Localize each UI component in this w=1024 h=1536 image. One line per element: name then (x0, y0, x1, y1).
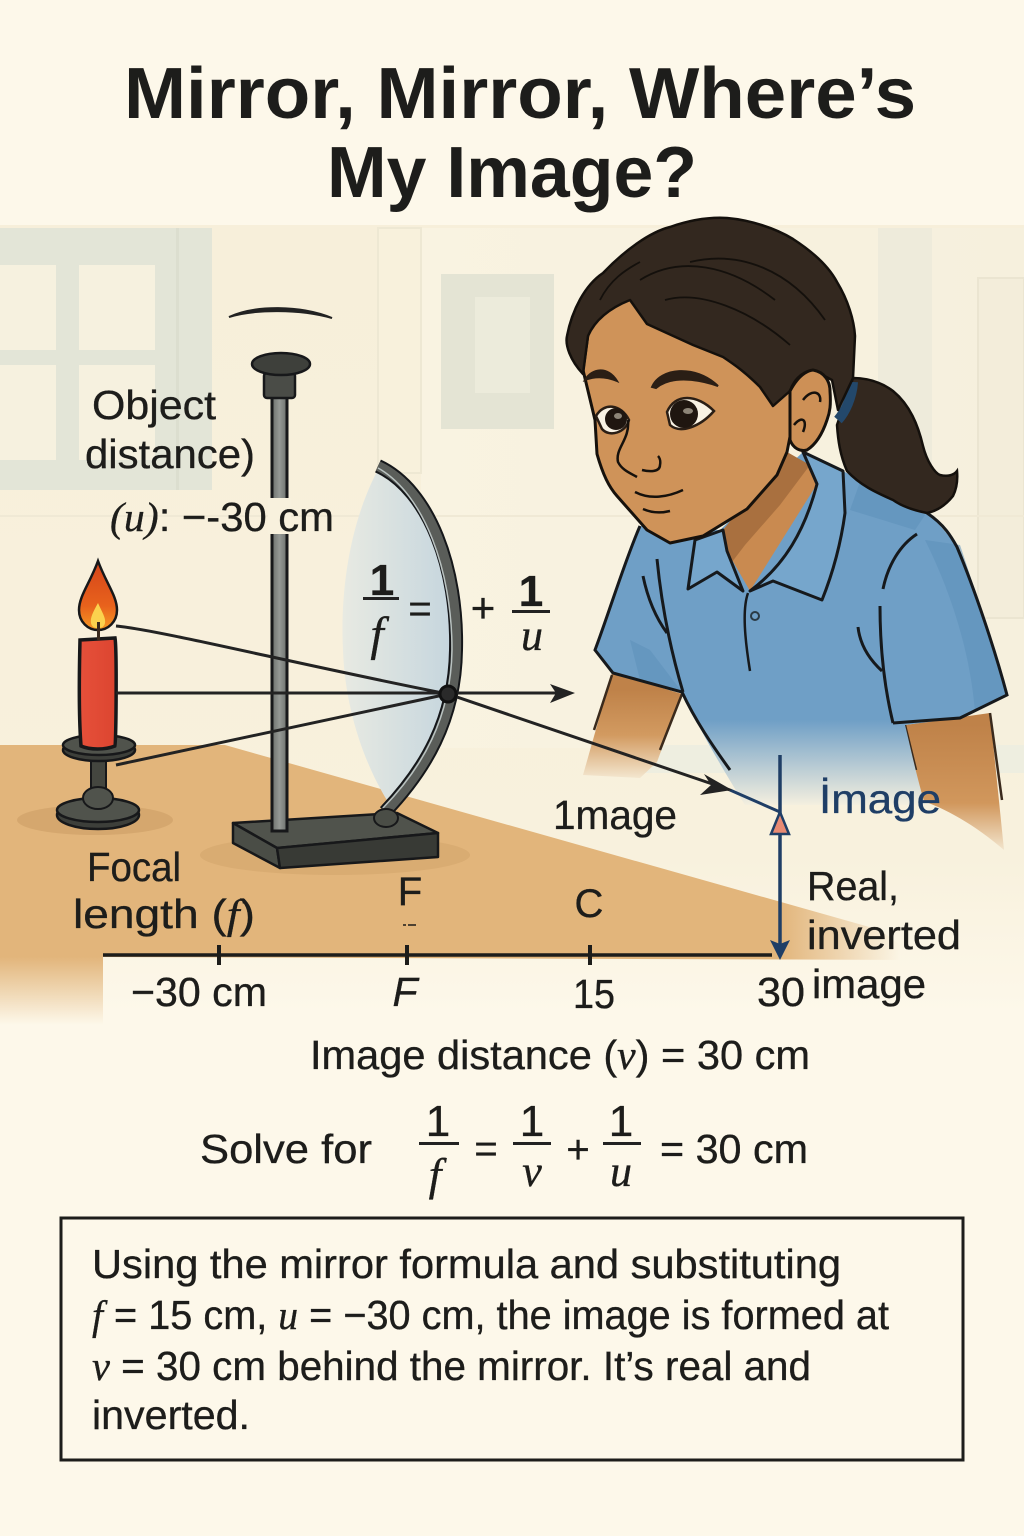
mirror arc (378, 466, 456, 812)
solve for equation: f (429, 1149, 448, 1200)
explanation box: v = 30 cm behind the mirror. It’s real and (92, 1343, 811, 1389)
label gap in rod (268, 498, 291, 534)
candle (17, 561, 173, 835)
distance axis: F (392, 969, 419, 1015)
hair (567, 218, 855, 410)
focal length label: length ( f) (73, 891, 255, 937)
solve for equation: 1 (426, 1097, 450, 1146)
concave mirror with lens (342, 466, 456, 812)
title (124, 54, 916, 213)
formula on lens: 1 (519, 567, 543, 616)
hair tie (838, 382, 853, 420)
explanation box: inverted. (92, 1392, 250, 1438)
real inverted image label: image (812, 961, 926, 1007)
nose (618, 420, 660, 477)
real inverted image label: inverted (807, 912, 961, 958)
shirt shading (630, 482, 1007, 712)
base shadow (200, 835, 470, 875)
image distance equation: Image distance (v) = 30 cm (310, 1032, 810, 1078)
real inverted image label: Real, (807, 863, 899, 909)
object distance label: Object (92, 382, 217, 428)
focal length label: Focal (87, 844, 181, 890)
face (583, 290, 805, 543)
formula on lens (363, 556, 550, 661)
right collar (750, 452, 845, 600)
image labels: 1mage (553, 792, 677, 838)
shirt (595, 452, 1007, 805)
solve for equation: 1 (609, 1097, 633, 1146)
hair strands (600, 259, 825, 345)
right arm (905, 713, 1004, 850)
neck (723, 452, 817, 591)
solve for equation: = (474, 1127, 498, 1171)
left arm (583, 673, 682, 778)
distance axis: 30 (757, 969, 805, 1015)
distance axis: −30 cm (131, 969, 267, 1015)
explanation box: Using the mirror formula and substituting (92, 1241, 841, 1287)
title: My Image? (327, 133, 697, 213)
object distance label: distance) (85, 431, 255, 477)
formula on lens: + (471, 584, 495, 631)
left collar (688, 530, 743, 591)
placket and button (745, 593, 759, 671)
ear (790, 370, 830, 451)
solve for equation: 1 (520, 1097, 544, 1146)
distance axis (103, 870, 805, 1017)
image labels: İmage (819, 776, 941, 822)
real inverted image label (807, 863, 961, 1007)
solve for equation (200, 1097, 808, 1200)
formula on lens: 1 (370, 556, 394, 605)
solve for equation: u (610, 1147, 632, 1196)
shirt outlines (595, 513, 1007, 770)
window (0, 228, 212, 490)
table (0, 745, 920, 1025)
distance axis: F (398, 870, 422, 914)
formula on lens: f (370, 608, 389, 661)
flame (79, 561, 117, 630)
inverted image arrow (770, 755, 790, 960)
distance axis: 15 (573, 971, 615, 1017)
title: Mirror, Mirror, Where’s (124, 54, 916, 134)
explanation box (61, 1218, 963, 1460)
explanation box: f = 15 cm, u = −30 cm, the image is formed at (92, 1292, 890, 1338)
room background (0, 225, 1024, 1015)
left eye (596, 407, 629, 433)
focal length label (73, 844, 255, 937)
solve for equation: + (566, 1128, 590, 1172)
arm outlines (594, 675, 1002, 800)
solve for equation: = 30 cm (660, 1126, 808, 1172)
eyebrows (652, 371, 718, 388)
formula on lens: = (408, 587, 432, 631)
right eye (667, 398, 714, 429)
formula on lens: u (521, 611, 543, 660)
lens glass (342, 466, 450, 802)
candle body (79, 638, 116, 749)
girl illustration (567, 218, 1007, 850)
object distance label (85, 382, 334, 540)
solve for equation: Solve for (200, 1126, 372, 1172)
retort stand (200, 308, 470, 875)
ponytail (837, 378, 957, 513)
solve for equation: v (522, 1147, 542, 1196)
light rays (116, 626, 780, 812)
candle shadow (17, 805, 173, 835)
object distance label: (u): −-30 cm (110, 494, 334, 540)
distance axis: C (575, 882, 603, 926)
mouth (635, 490, 683, 512)
arc above stand (229, 308, 332, 318)
image labels (553, 776, 941, 838)
